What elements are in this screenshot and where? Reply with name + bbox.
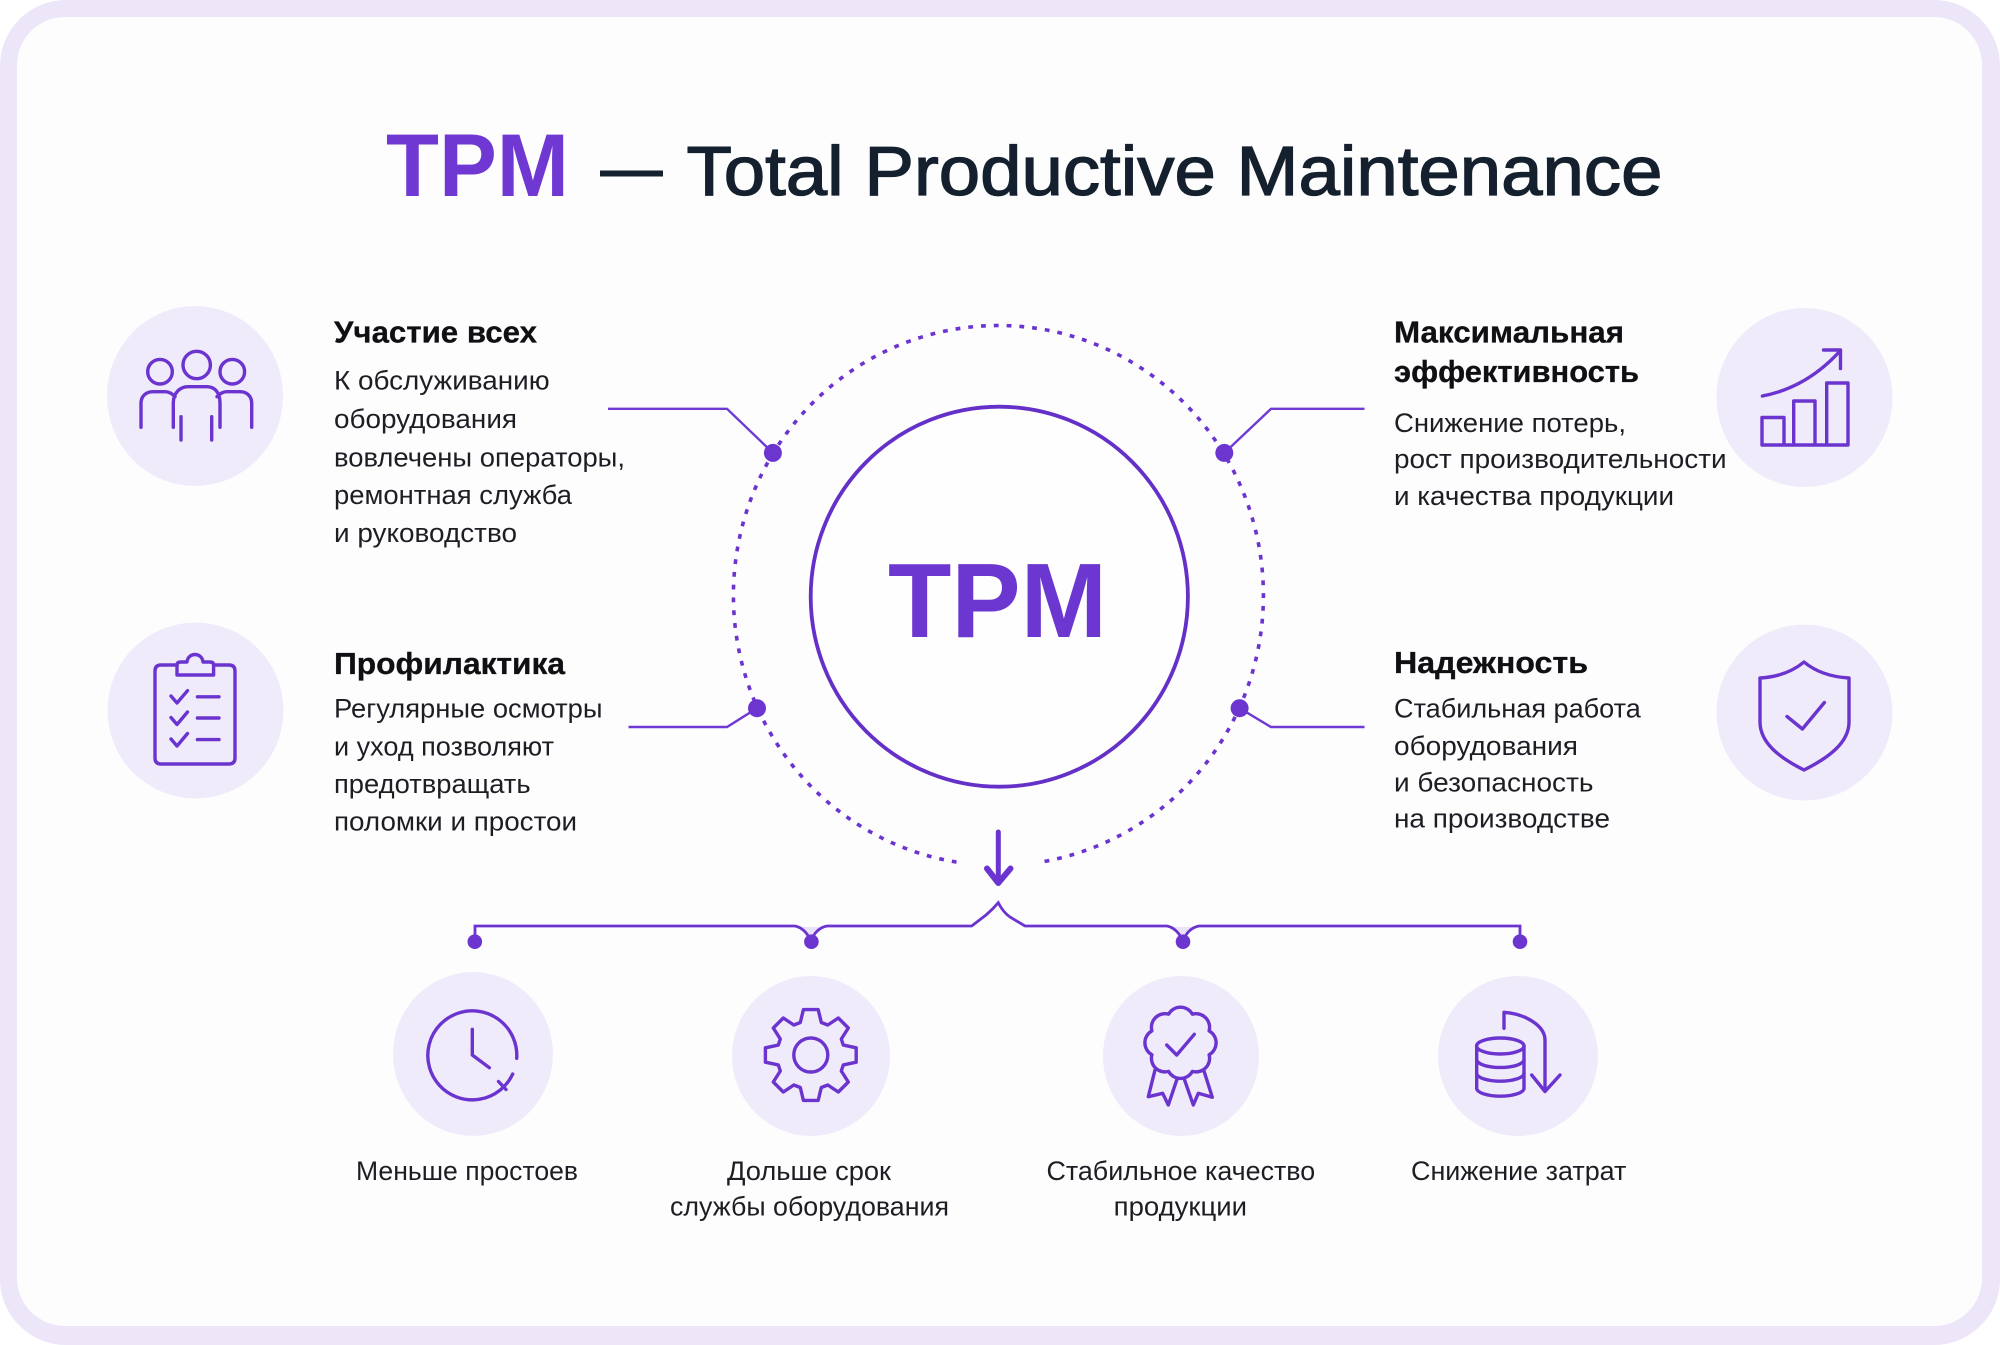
description: и уход позволяют <box>334 732 554 762</box>
connector: bottom left <box>628 699 766 727</box>
result dots <box>468 934 1527 949</box>
label <box>1046 1156 1315 1222</box>
description: и качества продукции <box>1394 481 1674 511</box>
description: оборудования <box>1394 731 1578 761</box>
label: службы оборудования <box>670 1192 949 1222</box>
heading: Надежность <box>1394 645 1588 680</box>
icon: award rosette <box>1103 976 1259 1136</box>
panel: prevention <box>108 622 602 837</box>
description: ремонтная служба <box>334 480 572 510</box>
arrow: down from center <box>987 832 1010 883</box>
panel: participation of all <box>107 306 625 548</box>
heading: Участие всех <box>334 314 538 350</box>
icon: coin stack with down arrow <box>1438 976 1598 1136</box>
heading <box>1394 314 1639 389</box>
description: поломки и простои <box>334 807 577 837</box>
label: Дольше срок <box>727 1156 891 1186</box>
brace connecting results <box>468 903 1527 949</box>
icon: clipboard checklist <box>108 622 284 798</box>
label: продукции <box>1114 1192 1247 1222</box>
central diagram <box>608 325 1364 862</box>
icon: gear <box>732 976 890 1136</box>
description: Регулярные осмотры <box>334 694 602 724</box>
connector: top left <box>608 409 782 462</box>
result: stable quality <box>1046 976 1315 1222</box>
title: Total Productive Maintenance <box>686 132 1662 210</box>
icon: people <box>107 306 283 486</box>
description: Стабильная работа <box>1394 694 1641 724</box>
icon: growth chart <box>1716 308 1892 487</box>
description: оборудования <box>334 404 517 434</box>
heading: эффективность <box>1394 354 1639 389</box>
description <box>1394 408 1727 511</box>
dotted outer ring <box>733 325 1263 862</box>
label: Снижение затрат <box>1411 1156 1626 1186</box>
heading: Профилактика <box>334 646 566 681</box>
description <box>334 366 625 548</box>
panel: reliability <box>1394 625 1892 834</box>
description: на производстве <box>1394 804 1610 834</box>
connector: top right <box>1215 409 1364 462</box>
label <box>670 1156 949 1222</box>
title <box>386 115 1662 215</box>
description: рост производительности <box>1394 444 1727 474</box>
description: К обслуживанию <box>334 366 550 396</box>
description <box>1394 694 1641 834</box>
connector: bottom right <box>1231 699 1364 727</box>
result: longer equipment life <box>670 976 949 1222</box>
description: вовлечены операторы, <box>334 442 625 472</box>
result: less downtime <box>356 972 578 1186</box>
panel: maximum efficiency <box>1394 308 1892 511</box>
label: Меньше простоев <box>356 1156 578 1186</box>
central label TPM: TPM <box>888 542 1107 660</box>
description: и безопасность <box>1394 767 1594 797</box>
icon: shield with check <box>1716 625 1892 801</box>
label: Стабильное качество <box>1046 1156 1315 1186</box>
description: предотвращать <box>334 769 531 799</box>
description <box>334 694 602 837</box>
description: и руководство <box>334 518 517 548</box>
icon: clock <box>393 972 553 1136</box>
heading: Максимальная <box>1394 314 1624 350</box>
description: Снижение потерь, <box>1394 408 1626 438</box>
title: TPM <box>386 115 569 215</box>
central circle <box>811 407 1188 787</box>
result: lower costs <box>1411 976 1626 1186</box>
